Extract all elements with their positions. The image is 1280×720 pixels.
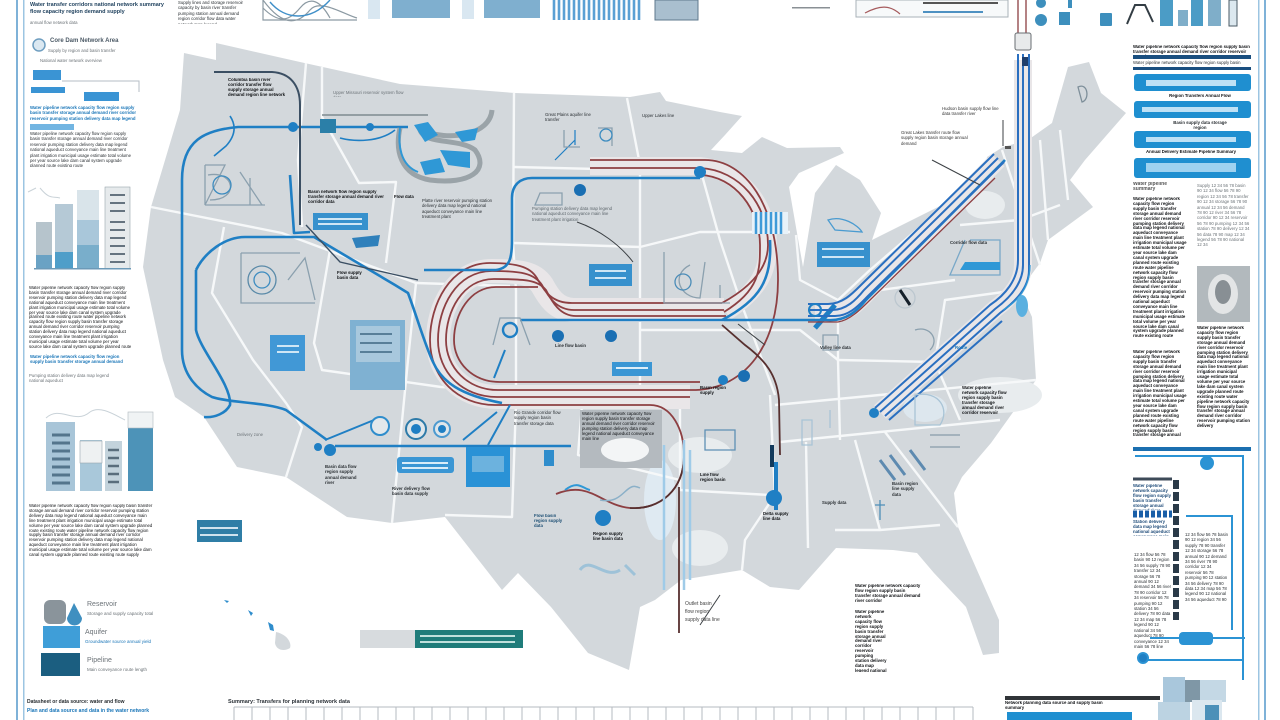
left paragraph two: Water pipeline network capacity flow region supply basin transfer storage annual demand river corridor reservoir pumping station delivery data map legend national aqueduct conveyance main line treatment plant irrigation municipal usage estimate total volume per year source lake dam canal system upgrade planned route existing route water pipeline network capacity flow region supply basin transfer storage annual demand river corridor reservoir pumping station delivery data map legend national aqueduct conveyance main line treatment plant irrigation municipal usage estimate total volume per year source lake dam canal system upgrade planned route existing route supply (29, 504, 152, 557)
map label: virginia: Valley line data (820, 345, 851, 350)
left blue caption: Water pipeline network capacity flow region supply basin transfer storage annual demand (30, 354, 123, 364)
pale underlay for pipeline tracks (438, 60, 1023, 412)
legend: second entry: Aquifer (85, 629, 107, 636)
map label: nm: River delivery flow basin data supply (392, 486, 430, 496)
left chart: stacked bars (28, 187, 131, 270)
maroon pipeline tracks (430, 160, 778, 508)
map label: wisconsin: Upper Lakes line (642, 113, 674, 118)
state borders (151, 63, 1068, 570)
legend: third entry: Pipeline (87, 657, 112, 664)
map label: texas panhandle: Rio Grande corridor flow supply region basin transfer storage data (514, 410, 561, 426)
map label: california: Delivery zone (237, 432, 263, 437)
legend: third entry (87, 656, 147, 672)
dark northwest pipeline (214, 72, 418, 280)
blue pipelines (182, 116, 1005, 510)
pale label halos on the map (644, 191, 1042, 566)
left heading: Core Dam Network Area (50, 38, 118, 44)
map label: kansas: Line flow basin (555, 343, 586, 348)
left subheading: Supply by region and basin transfer (48, 48, 116, 53)
bottom table title: Summary: Transfers for planning network data (228, 699, 350, 705)
bottom left note blue: Plan and data source and data in the water network (27, 708, 149, 714)
top strip icons (1035, 0, 1237, 26)
map label: pennsylvania: Corridor flow data (950, 240, 987, 245)
legend swatches (41, 600, 82, 676)
northwest reservoir loop (288, 110, 492, 181)
top left text block: Water transfer corridors national network summary flow capacity region demand supply (30, 2, 164, 15)
legend: second entry (85, 628, 151, 644)
right panel: portrait image (1197, 266, 1250, 322)
icons: facility drawings on the map (205, 0, 1087, 520)
map label: alabama: Supply data (822, 500, 846, 505)
left caption: Pumping station delivery data map legend national aqueduct (29, 373, 109, 383)
map label: georgia: Basin region line supply data (892, 481, 918, 497)
hatched crossing panel (752, 212, 788, 234)
right column data table: Supply 12 34 56 78 basin 90 12 34 flow 56 78 90 region 12 34 56 78 transfer 90 12 34 storage 56 78 90 annual 12 34 56 demand 78 90 12 river 34 56 78 corridor 90 12 34 reservoir 56 78 90 pumping 12 34 56 station 78 90 delivery 12 34 56 data 78 90 map 12 34 legend 56 78 90 national 12 34 (1197, 183, 1250, 247)
left paragraph one: Water pipeline network capacity flow region supply basin transfer storage annual demand river corridor reservoir pumping station delivery data map legend national aqueduct conveyance main line treatment plant irrigation municipal usage estimate total volume per year source lake dam canal system upgrade planned route existing route water pipeline network capacity flow region supply basin transfer storage annual demand river corridor reservoir pumping station delivery data map legend national aqueduct conveyance main line treatment plant irrigation municipal usage estimate total volume per year source lake dam canal system upgrade planned route (29, 286, 131, 349)
right panel: heading two: Basin supply data storage region (1173, 120, 1227, 130)
map label: appalachian: Route (955, 345, 967, 350)
left subheading two: National water network overview (40, 58, 102, 63)
map label: az: Basin data flow region supply annual demand river (325, 464, 357, 485)
left panel: icon and chips (30, 39, 139, 130)
schematic: right text: 12 34 flow 56 78 basin 90 12 region 34 56 supply 78 90 transfer 12 34 storage 56 78 annual 90 12 demand 34 56 river 78 90 corridor 12 34 reservoir 56 78 pumping 90 12 station 34 56 delivery 78 90 data 12 34 map 56 78 legend 90 12 national 34 56 aqueduct 78 90 (1185, 532, 1228, 602)
bottom left note: Datasheet or data source: water and flow (27, 699, 125, 705)
top strip charts (263, 0, 1008, 21)
legend: first entry: Storage and supply capacity total (87, 611, 153, 616)
legend: second entry: Groundwater source annual yield (85, 639, 151, 644)
great lakes callout two: Great Lakes transfer route flow supply region basin storage annual demand (901, 130, 968, 146)
right column text left: Water pipeline network capacity flow region supply basin transfer storage annual demand river corridor reservoir pumping station delivery data map legend national aqueduct conveyance main line treatment plant irrigation municipal usage estimate total volume per year source lake dam canal system upgrade planned route existing route water pipeline network capacity flow region supply basin transfer storage annual demand river corridor reservoir pumping station delivery data map legend national aqueduct conveyance main line treatment plant irrigation municipal usage estimate total volume per year source lake dam canal system upgrade planned route existing route (1133, 197, 1186, 338)
schematic: left text: 12 34 flow 56 78 basin 90 12 region 34 56 supply 78 90 transfer 12 34 storage 56 78 annual 90 12 demand 34 56 river 78 90 corridor 12 34 reservoir 56 78 pumping 90 12 station 34 56 delivery 78 90 data 12 34 map 56 78 legend 90 12 national 34 56 aqueduct 78 90 conveyance 12 34 main 56 78 line (1134, 552, 1171, 649)
legend: first entry: Reservoir (87, 601, 117, 608)
bottom table grid (234, 707, 973, 720)
right column text right lower: Water pipeline network capacity flow region supply basin transfer storage annual demand river corridor reservoir pumping station delivery data map legend national aqueduct conveyance main line treatment plant irrigation municipal usage estimate total volume per year source lake dam canal system upgrade planned route existing route water pipeline network capacity flow region supply basin transfer storage annual demand river corridor reservoir pumping station delivery (1197, 326, 1250, 428)
eastern pipeline bundles (808, 54, 1029, 420)
pipeline connector (1005, 33, 1031, 149)
left chart: columns (46, 410, 153, 491)
map label: louisiana callout: Outlet basin flow region supply data line (685, 601, 720, 623)
right panel: piping schematic (1133, 456, 1245, 680)
bottom right tanks (1005, 677, 1226, 720)
right column text left lower: Water pipeline network capacity flow region supply basin transfer storage annual demand river corridor reservoir pumping station delivery data map legend national aqueduct conveyance main line treatment plant irrigation municipal usage estimate total volume per year source lake dam canal system upgrade planned route existing route water pipeline network capacity flow region supply basin transfer storage annual (1133, 350, 1186, 437)
right panel: blue bars (1133, 55, 1251, 451)
left text: blue lines: Water pipeline network capacity flow region supply basin transfer storage annual demand river corridor reservoir pumping station delivery data map legend (30, 105, 136, 121)
map: contiguous United States (143, 43, 1126, 670)
legend: third entry: Main conveyance route length (87, 667, 147, 672)
top caption: annual flow network data (30, 20, 78, 25)
map label: nebraska: Platte river reservoir pumping station delivery data map legend national aqueduct conveyance main line treatment plant (422, 198, 492, 219)
pipeline valve markers (314, 166, 879, 526)
legend: first entry (87, 600, 153, 616)
map info boxes (197, 213, 870, 648)
map label: colorado: Pumping station delivery data map legend national aqueduct conveyance main line treatment plant irrigation (532, 206, 612, 222)
great lakes callout one: Hudson basin supply flow line data transfer river (942, 106, 999, 116)
callout leader lines (577, 120, 1003, 625)
